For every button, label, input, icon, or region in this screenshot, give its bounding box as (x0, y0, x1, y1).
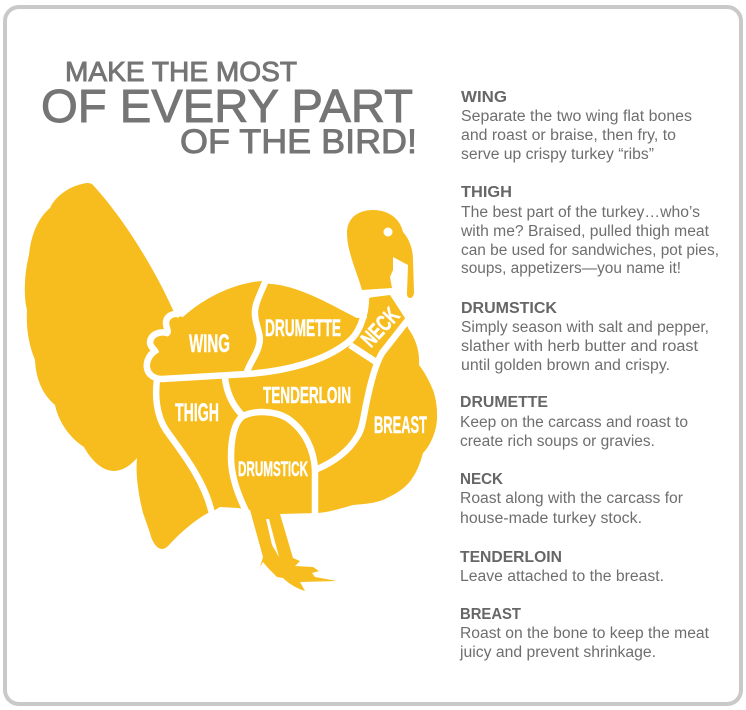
text: wing: serve up crispy turkey “ribs” (461, 146, 654, 163)
thigh cut line (156, 380, 212, 514)
text: breast: juicy and prevent shrinkage. (459, 644, 656, 661)
text: thigh: with me? Braised, pulled thigh meat (460, 223, 710, 240)
text: drumstick: until golden brown and crispy. (461, 357, 670, 374)
leg gap (266, 519, 279, 557)
text: drumstick (461, 300, 709, 374)
cut labels (175, 302, 427, 481)
text: wing (461, 89, 692, 163)
head and snood (347, 210, 414, 298)
text: drumstick: DRUMSTICK (461, 300, 558, 317)
text: thigh (460, 184, 719, 277)
text: neck: house-made turkey stock. (460, 510, 642, 527)
cut labels: WING (189, 330, 230, 358)
neck lower cut line (350, 345, 376, 362)
text: breast: BREAST (460, 606, 522, 623)
eye (384, 228, 392, 236)
text: thigh: THIGH (461, 184, 512, 201)
text: thigh: can be used for sandwiches, pot pies, (461, 242, 719, 259)
text: neck: NECK (460, 471, 504, 488)
text: drumette (460, 394, 688, 450)
cut labels: BREAST (374, 412, 427, 439)
turkey body and tail silhouette (25, 183, 437, 591)
title: OF THE BIRD! (180, 123, 417, 161)
title: MAKE THE MOST (65, 56, 297, 87)
text: wing: WING (461, 89, 507, 106)
text: tenderloin: TENDERLOIN (460, 549, 562, 566)
cut labels: DRUMETTE (265, 315, 341, 342)
wing and drumette divider (247, 280, 266, 372)
text: breast: Roast on the bone to keep the meat (460, 625, 710, 642)
cut labels: NECK (355, 302, 405, 352)
text: drumette: Keep on the carcass and roast to (460, 414, 688, 431)
text: wing: Separate the two wing flat bones (461, 108, 692, 125)
title (41, 56, 417, 161)
text: tenderloin (460, 549, 664, 585)
turkey diagram (25, 183, 437, 591)
text: neck: Roast along with the carcass for (460, 490, 683, 507)
text: thigh: The best part of the turkey…who’s (461, 204, 700, 221)
text: thigh: soups, appetizers—you name it! (461, 260, 681, 277)
cut labels: THIGH (175, 399, 219, 427)
text: breast (459, 606, 710, 661)
text: tenderloin: Leave attached to the breast. (460, 568, 664, 585)
neck and breast cut line (315, 316, 411, 470)
title: OF EVERY PART (41, 80, 413, 132)
text: neck (460, 471, 683, 527)
tenderloin cut line (225, 378, 243, 416)
wing outline and back cut line (147, 296, 366, 379)
text: drumette: create rich soups or gravies. (460, 433, 655, 450)
cut labels: TENDERLOIN (263, 382, 351, 408)
text: drumstick: slather with herb butter and roast (461, 338, 699, 355)
text: wing: and roast or braise, then fry, to (461, 127, 676, 144)
text: drumstick: Simply season with salt and pepper, (461, 319, 709, 336)
text: drumette: DRUMETTE (460, 394, 548, 411)
drumstick cut line (231, 412, 315, 514)
cut labels: DRUMSTICK (238, 458, 308, 481)
